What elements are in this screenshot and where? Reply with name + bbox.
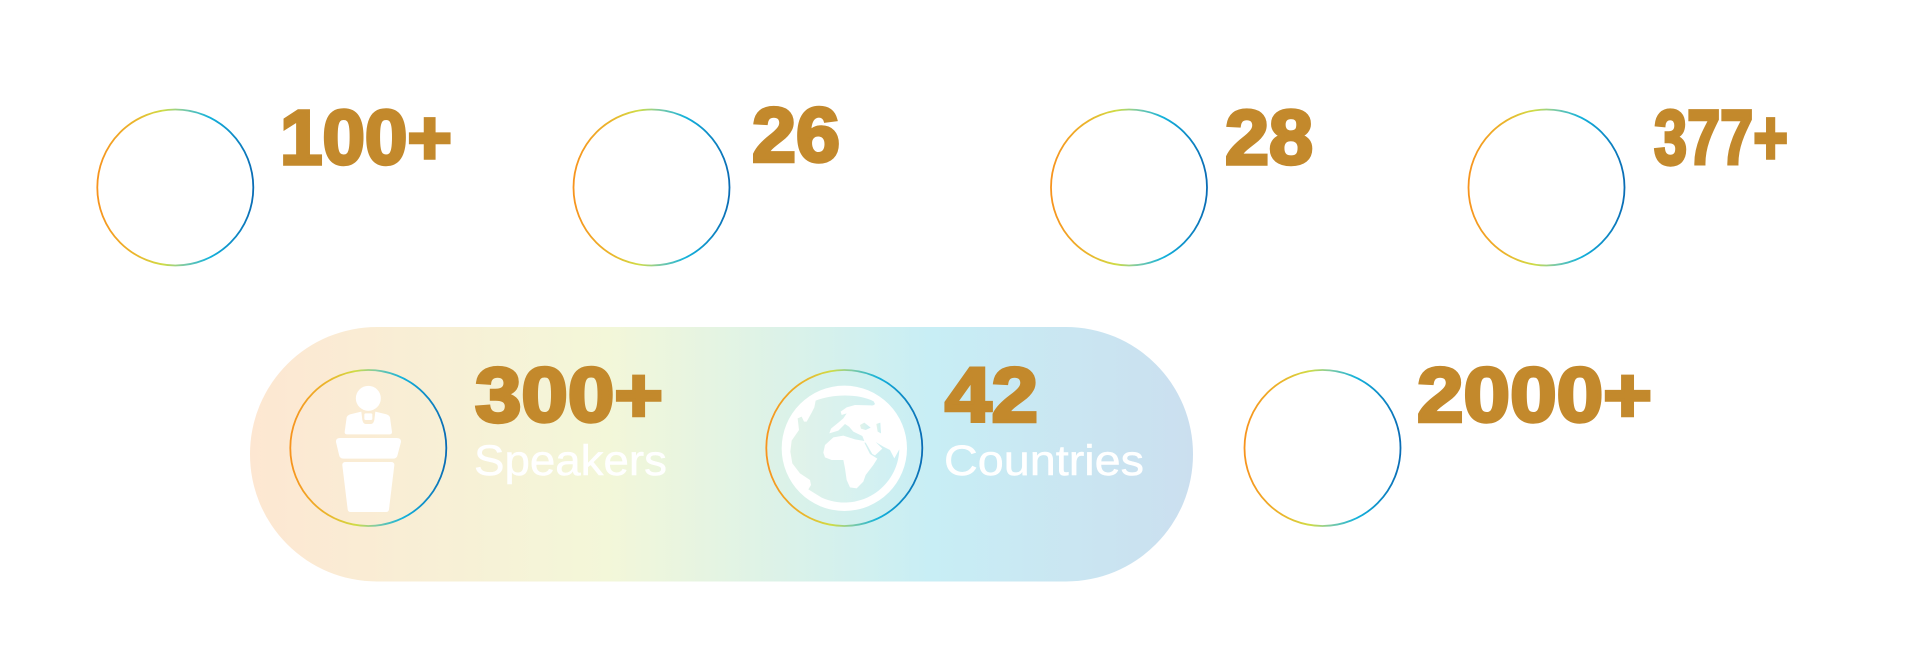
stat: 26: 26 (752, 92, 840, 178)
stat: 100+ (97, 95, 452, 266)
stat: 42 Countries: Countries (944, 437, 1144, 485)
icon: globe (782, 386, 907, 511)
stat: 2000+ (1244, 352, 1652, 526)
stat: 100+: 100+ (280, 95, 452, 181)
stat: 28: 28 (1225, 95, 1313, 181)
stat: 42 Countries: 42 (945, 352, 1038, 438)
stat: 300+ Speakers: Speakers (474, 437, 667, 485)
stat: 377+: 377+ (1654, 95, 1788, 181)
icon: speaker at podium (336, 386, 401, 512)
stat: 2000+: 2000+ (1417, 352, 1652, 438)
stat: 26 (574, 92, 840, 266)
stat: 300+ Speakers: 300+ (475, 352, 663, 438)
stat: 42 Countries (766, 352, 1144, 526)
stat: 300+ Speakers (290, 352, 667, 526)
panel: gradient pill (250, 327, 1193, 582)
stat: 28 (1051, 95, 1313, 266)
stat: 377+ (1468, 95, 1788, 266)
